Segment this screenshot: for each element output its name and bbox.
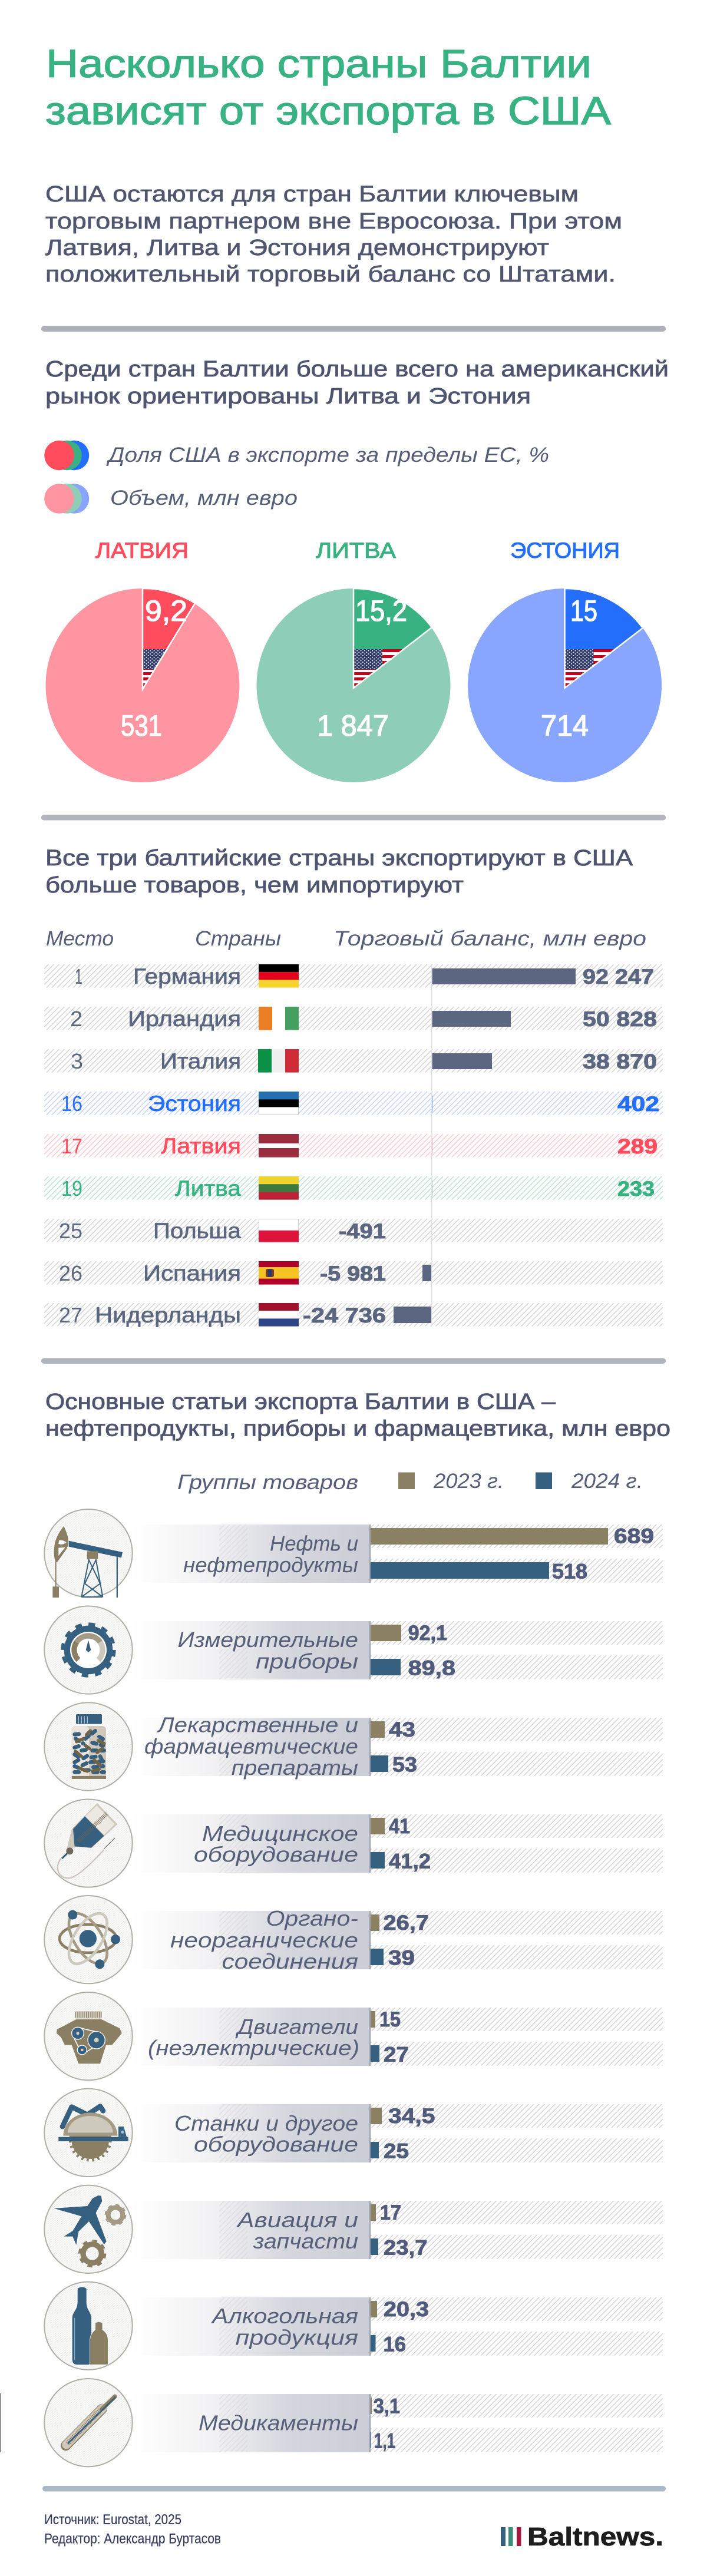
row: Lithuania: Литва — [175, 1176, 241, 1201]
label — [178, 1628, 358, 1674]
legend: export chart: 2024 г. — [571, 1470, 643, 1493]
row: Estonia — [44, 1092, 663, 1116]
logo: Baltnews: Baltnews. — [527, 2522, 663, 2551]
source note — [44, 2512, 221, 2547]
icon: US flag in slice — [354, 649, 403, 687]
row: Netherlands — [44, 1303, 663, 1327]
flag: Netherlands — [259, 1303, 299, 1327]
legend: pie charts — [44, 441, 549, 514]
pie chart: Lithuania: ЛИТВА — [316, 538, 396, 563]
label: соединения — [222, 1949, 358, 1973]
source note: Редактор: Александр Буртасов — [44, 2531, 221, 2547]
row: medicines: 1,1 — [374, 2430, 395, 2453]
table header — [46, 927, 646, 950]
row: Latvia: 289 — [617, 1135, 658, 1158]
row: Italy: 38 870 — [583, 1050, 657, 1073]
heading: trade balance — [45, 846, 633, 898]
row: medical equipment: 41,2 — [389, 1850, 431, 1873]
row: aviation — [44, 2185, 663, 2273]
row: Poland: Польша — [153, 1219, 241, 1243]
row: Poland: 25 — [59, 1219, 82, 1243]
flag: Ireland — [259, 1007, 299, 1030]
label: Медицинское — [202, 1821, 358, 1846]
intro text: положительный торговый баланс со Штатами. — [45, 262, 616, 287]
pie chart: Latvia: 9,2 — [145, 594, 187, 627]
row: Netherlands: -24 736 — [303, 1304, 386, 1327]
row: Germany — [44, 964, 663, 988]
row: Spain: -5 981 — [320, 1262, 386, 1285]
row: Lithuania — [44, 1176, 663, 1201]
trade balance chart — [44, 964, 663, 1327]
label — [170, 1906, 358, 1973]
row: oil: 689 — [614, 1525, 654, 1548]
row: Spain: 26 — [59, 1261, 82, 1285]
row: engines: 27 — [384, 2043, 409, 2066]
row: Latvia: 17 — [61, 1134, 82, 1158]
intro text: США остаются для стран Балтии ключевым — [45, 182, 579, 207]
row: Poland — [44, 1219, 663, 1243]
row: medicines: 3,1 — [374, 2395, 400, 2418]
label — [183, 1532, 358, 1577]
icon: bottles — [44, 2282, 133, 2370]
label: Медикаменты — [199, 2410, 358, 2435]
label: Двигатели — [235, 2015, 358, 2039]
row: Ireland: 2 — [70, 1007, 82, 1031]
icon: airplane and gears — [44, 2185, 133, 2273]
flag: Poland — [259, 1219, 299, 1242]
pie chart: Lithuania: 15,2 — [355, 594, 407, 627]
label: нефтепродукты — [183, 1553, 358, 1577]
table header: Торговый баланс, млн евро — [333, 927, 646, 950]
row: medical equipment — [44, 1799, 663, 1887]
label: препараты — [232, 1755, 358, 1780]
icon: pill bottle — [44, 1702, 133, 1791]
label: неорганические — [170, 1928, 358, 1952]
label: Лекарственные и — [157, 1713, 358, 1737]
icon: US flag in slice — [566, 649, 614, 687]
flag: Estonia — [259, 1092, 299, 1115]
pie chart: Lithuania — [257, 538, 450, 782]
row: Netherlands: Нидерланды — [95, 1303, 241, 1327]
intro text — [45, 182, 622, 287]
label: приборы — [256, 1649, 358, 1674]
label: фармацевтические — [144, 1734, 358, 1758]
intro text: торговым партнером вне Евросоюза. При этом — [45, 209, 622, 234]
row: Ireland: 50 828 — [583, 1008, 657, 1031]
title: Насколько страны Балтии — [46, 42, 592, 86]
label: оборудование — [194, 2132, 358, 2157]
row: Ireland: Ирландия — [128, 1007, 241, 1031]
row: instruments — [44, 1606, 663, 1694]
label — [144, 1713, 358, 1780]
row: oil: 518 — [552, 1560, 587, 1583]
icon: atom — [44, 1896, 133, 1983]
row: oil — [44, 1509, 663, 1598]
row: Germany: Германия — [133, 964, 241, 988]
heading: export items — [45, 1390, 670, 1441]
row: engines: 15 — [379, 2008, 401, 2031]
table header: Место — [46, 927, 114, 950]
heading: export items: Основные статьи экспорта Балтии в США – — [45, 1390, 556, 1414]
row: machine tools: 25 — [384, 2140, 409, 2163]
title: зависят от экспорта в США — [45, 89, 611, 133]
row: medical equipment: 41 — [389, 1815, 410, 1838]
heading: trade balance: Все три балтийские страны экспортируют в США — [45, 846, 633, 871]
label — [148, 2015, 359, 2060]
intro text: Латвия, Литва и Эстония демонстрируют — [45, 236, 549, 260]
row: compounds: 39 — [388, 1947, 415, 1970]
row: Italy: Италия — [160, 1049, 241, 1073]
pie chart: Latvia — [46, 538, 239, 782]
flag: Spain — [259, 1261, 299, 1285]
legend: export chart — [177, 1470, 643, 1494]
row: instruments: 92,1 — [408, 1622, 447, 1645]
label — [194, 1821, 358, 1867]
label — [174, 2111, 358, 2157]
source note: Источник: Eurostat, 2025 — [44, 2512, 181, 2528]
label — [236, 2208, 358, 2253]
heading: share of US in exports: рынок ориентированы Литва и Эстония — [45, 384, 531, 409]
row: compounds — [44, 1896, 663, 1983]
row: pharmaceuticals: 43 — [389, 1718, 415, 1741]
row: compounds: 26,7 — [383, 1912, 429, 1935]
legend label: volume: Объем, млн евро — [110, 487, 298, 510]
legend label: share: Доля США в экспорте за пределы ЕС, % — [106, 444, 549, 467]
row: Germany: 92 247 — [583, 965, 654, 988]
row: Estonia: 402 — [617, 1093, 659, 1116]
legend icon: volume — [44, 484, 89, 514]
row: Lithuania: 19 — [61, 1176, 82, 1201]
pie chart: Estonia: 714 — [541, 709, 589, 742]
icon: gauge gear — [44, 1606, 133, 1694]
icon: thermometer — [44, 2379, 133, 2466]
label: оборудование — [194, 1843, 358, 1867]
icon: US flag in slice — [143, 649, 166, 687]
label: Алкогольная — [211, 2304, 358, 2328]
label: (неэлектрические) — [148, 2036, 359, 2060]
row: Italy: 3 — [71, 1049, 83, 1073]
heading: export items: нефтепродукты, приборы и фармацевтика, млн евро — [45, 1416, 670, 1441]
row: aviation: 17 — [380, 2201, 401, 2224]
row: Latvia: Латвия — [161, 1134, 241, 1158]
row: machine tools: 34,5 — [388, 2105, 435, 2128]
legend: export chart: 2023 г. — [433, 1470, 504, 1493]
pie chart: Latvia: ЛАТВИЯ — [95, 538, 189, 563]
legend: export chart: Группы товаров — [177, 1471, 358, 1494]
label — [211, 2304, 358, 2349]
row: Spain: Испания — [143, 1261, 241, 1285]
row: Netherlands: 27 — [59, 1303, 82, 1327]
label: Измерительные — [178, 1628, 358, 1652]
row: medicines — [44, 2379, 663, 2466]
row: aviation: 23,7 — [384, 2237, 428, 2260]
row: Spain — [44, 1261, 663, 1285]
heading: share of US in exports: Среди стран Балтии больше всего на американский — [45, 357, 669, 382]
pie chart: Latvia: 531 — [121, 709, 162, 742]
heading: trade balance: больше товаров, чем импортируют — [45, 873, 464, 898]
label: продукция — [236, 2326, 358, 2349]
row: alcohol: 16 — [383, 2333, 406, 2356]
row: pharmaceuticals — [44, 1702, 663, 1791]
row: instruments: 89,8 — [408, 1657, 455, 1680]
row: Poland: -491 — [339, 1220, 386, 1243]
row: Latvia — [44, 1134, 663, 1158]
row: Ireland — [44, 1007, 663, 1031]
flag: Latvia — [259, 1134, 299, 1158]
pie chart: Estonia: 15 — [570, 594, 597, 627]
pie chart: Estonia — [468, 538, 662, 782]
flag: Lithuania — [259, 1176, 299, 1200]
icon: engine — [44, 1992, 133, 2080]
row: Estonia: 16 — [61, 1092, 82, 1116]
row: machine tools — [44, 2089, 663, 2177]
flag: Italy — [258, 1049, 299, 1073]
table header: Страны — [195, 927, 281, 950]
row: Estonia: Эстония — [148, 1092, 241, 1116]
label: Станки и другое — [174, 2111, 358, 2135]
heading: share of US in exports — [45, 357, 669, 409]
row: engines — [44, 1992, 663, 2080]
icon: IV bag — [44, 1799, 133, 1887]
row: Germany: 1 — [75, 964, 82, 988]
label: Органо- — [266, 1906, 358, 1930]
legend icon: share — [44, 441, 89, 470]
label: Авиация и — [236, 2208, 358, 2232]
icon: circular saw — [44, 2089, 133, 2177]
icon: oil pump — [44, 1509, 133, 1598]
row: Lithuania: 233 — [617, 1178, 655, 1201]
row: Italy — [44, 1049, 663, 1073]
pie chart: Estonia: ЭСТОНИЯ — [510, 538, 620, 563]
row: pharmaceuticals: 53 — [392, 1754, 417, 1777]
label: Нефть и — [270, 1532, 358, 1556]
row: alcohol: 20,3 — [384, 2298, 429, 2321]
row: alcohol — [44, 2282, 663, 2370]
pie chart: Lithuania: 1 847 — [317, 709, 389, 742]
label: запчасти — [253, 2229, 358, 2253]
flag: Germany — [259, 964, 299, 988]
title — [45, 42, 611, 133]
